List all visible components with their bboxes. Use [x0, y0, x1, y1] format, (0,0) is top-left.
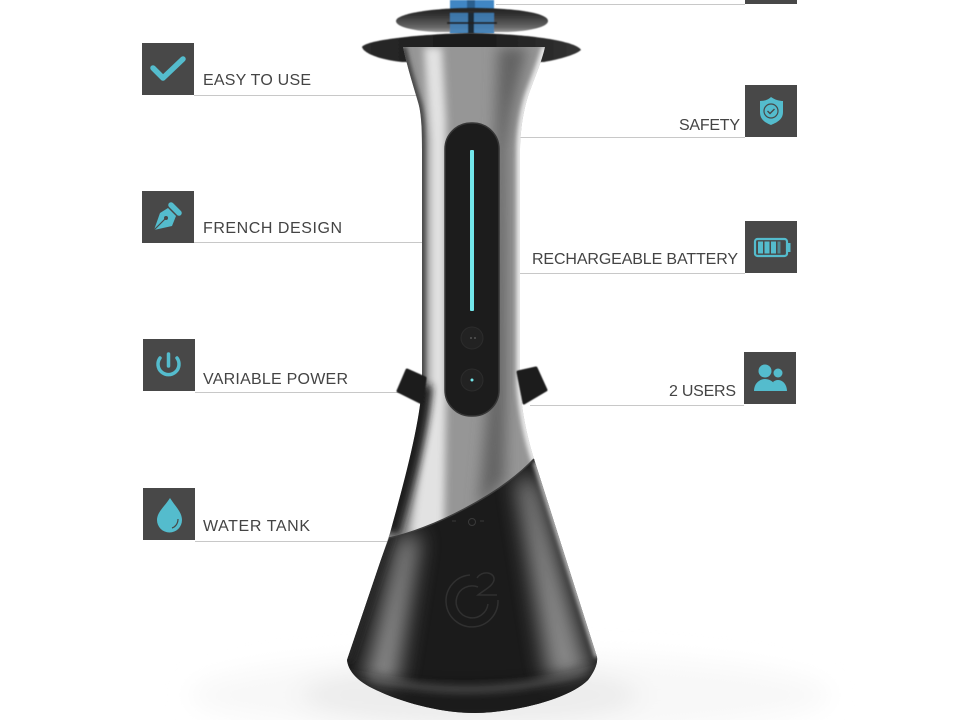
product: water flosser device	[347, 0, 598, 713]
feature: easy to use	[142, 43, 311, 95]
icon: check mark	[142, 43, 194, 95]
seam line	[389, 459, 534, 538]
foot reflection	[384, 676, 575, 696]
left highlight band	[410, 47, 446, 535]
foot shading	[352, 666, 596, 713]
feature: water tank	[143, 488, 310, 540]
infographic: product feature diagram	[142, 0, 797, 720]
top button	[461, 327, 483, 349]
water ripple under base	[190, 655, 830, 720]
small charging mark	[452, 518, 484, 526]
left dark edge neck	[403, 47, 422, 385]
label: 2 users: 2 USERS	[669, 383, 736, 400]
lower left highlight	[362, 535, 420, 690]
feature: variable power	[143, 339, 348, 391]
icon: battery	[745, 221, 797, 273]
bottom button	[461, 369, 483, 391]
feature: 2 users	[669, 352, 796, 404]
icon: power symbol	[143, 339, 195, 391]
feature: safety	[679, 85, 797, 137]
lower dark housing	[347, 460, 598, 713]
label: water tank: WATER TANK	[203, 518, 310, 535]
label: rechargeable battery: RECHARGEABLE BATTERY	[532, 251, 738, 268]
lower left dark edge	[347, 533, 390, 660]
right pale edge	[520, 47, 545, 462]
large rim	[362, 33, 581, 62]
light bar	[470, 150, 474, 311]
control panel	[445, 123, 499, 416]
label: variable power: VARIABLE POWER	[203, 371, 348, 388]
lower right highlight	[516, 478, 592, 680]
icon: shield	[745, 85, 797, 137]
upper disc	[396, 8, 548, 33]
label: easy to use: EASY TO USE	[203, 72, 311, 89]
embossed logo	[446, 573, 498, 627]
feature: rechargeable battery	[532, 221, 797, 273]
right knob	[518, 368, 546, 403]
feature: french design	[142, 191, 342, 243]
label: french design: FRENCH DESIGN	[203, 220, 342, 237]
icon: water drop	[143, 488, 195, 540]
left knob	[398, 370, 425, 403]
body shell with painted shading	[347, 47, 598, 713]
left dark edge cone	[390, 385, 422, 533]
feature: top cropped box	[745, 0, 797, 4]
blue water column	[450, 0, 494, 33]
right shade band	[478, 47, 528, 510]
icon: fountain pen nib	[142, 191, 194, 243]
icon: two people	[744, 352, 796, 404]
label: safety: SAFETY	[679, 117, 740, 134]
lower right pale edge	[535, 462, 597, 657]
leader lines	[194, 4, 745, 542]
